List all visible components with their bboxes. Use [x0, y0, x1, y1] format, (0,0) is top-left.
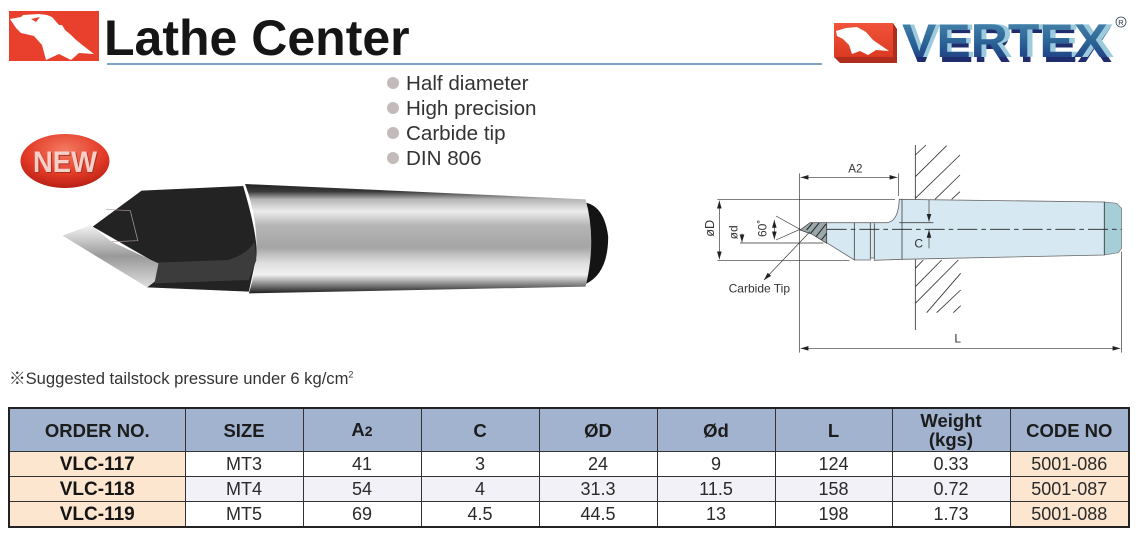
carbide tip — [800, 223, 827, 243]
specification table: 0.33 — [933, 454, 969, 474]
centre line — [827, 228, 1122, 231]
logo: red eagle — [9, 11, 99, 61]
tail — [1104, 202, 1122, 255]
feature bullet list: Carbide tip — [406, 122, 506, 145]
label 60 degrees: 60˚ — [756, 220, 770, 237]
specification table: 9 — [711, 454, 721, 474]
title underline — [107, 63, 822, 65]
specification table — [8, 407, 1130, 528]
specification table: Ød — [703, 420, 729, 440]
specification table: 11.5 — [699, 478, 733, 498]
specification table: 54 — [352, 478, 372, 498]
flat face highlight — [155, 242, 256, 283]
taper shank — [245, 184, 591, 293]
specification table: CODE NO — [1026, 420, 1112, 440]
specification table: 31.3 — [580, 478, 616, 498]
section lines — [854, 199, 1104, 260]
dimension lines — [717, 173, 1121, 353]
logo: Vertex brand: VERTEX — [906, 14, 1114, 67]
specification table: MT4 — [226, 478, 262, 498]
specification table: SIZE — [223, 420, 265, 440]
badge: NEW — [20, 134, 110, 188]
specification table: 5001-087 — [1031, 478, 1107, 498]
feature bullet list: Half diameter — [406, 72, 528, 95]
specification table: MT5 — [226, 504, 262, 524]
specification table: 158 — [818, 478, 849, 498]
carbide insert outline — [106, 209, 138, 242]
wall hatch — [915, 145, 961, 330]
photo: lathe center — [62, 184, 608, 294]
feature bullet list — [387, 72, 536, 170]
specification table: 124 — [818, 454, 849, 474]
logo: Vertex brand: R — [1118, 18, 1124, 27]
specification table: 4.5 — [467, 504, 493, 524]
specification table: ORDER NO. — [45, 420, 150, 440]
specification table: 44.5 — [580, 504, 616, 524]
specification table: VLC-117 — [60, 454, 135, 474]
specification table: MT3 — [226, 454, 262, 474]
specification table: A2 — [351, 418, 373, 440]
label L: L — [954, 331, 961, 345]
specification table: 24 — [588, 454, 608, 474]
cone tip — [63, 225, 159, 287]
specification table: 5001-088 — [1031, 504, 1107, 524]
specification table: VLC-119 — [60, 504, 135, 524]
specification table: (kgs) — [929, 429, 973, 450]
specification table: C — [473, 420, 487, 440]
badge: NEW: NEW — [34, 147, 99, 180]
specification table: 3 — [475, 454, 485, 474]
tail end — [586, 203, 608, 284]
label C: C — [914, 236, 923, 250]
specification table: 69 — [352, 504, 372, 524]
logo: Vertex brand — [834, 14, 1126, 70]
label diameter d: ød — [727, 225, 741, 239]
half-cut black neck — [93, 186, 257, 292]
specification table: 41 — [352, 454, 372, 474]
title: Lathe Center — [104, 10, 410, 66]
label diameter D: øD — [703, 220, 717, 237]
specification table: ØD — [584, 420, 612, 440]
feature bullet list: High precision — [406, 97, 536, 120]
specification table: 13 — [706, 504, 726, 524]
feature bullet list: DIN 806 — [406, 147, 482, 170]
logo: Vertex brand: VERTEX — [902, 14, 1108, 67]
technical diagram — [703, 144, 1122, 353]
specification table: VLC-118 — [60, 478, 135, 500]
specification table: 4 — [475, 478, 485, 498]
note: tailstock pressure: ※Suggested tailstock pressure under 6 kg/cm2 — [9, 369, 353, 388]
label carbide tip: Carbide Tip — [729, 282, 790, 296]
specification table: Weight — [920, 410, 982, 431]
specification table: 198 — [818, 504, 849, 524]
specification table: 1.73 — [933, 504, 969, 524]
specification table: 5001-086 — [1031, 454, 1107, 474]
specification table: 0.72 — [933, 478, 969, 498]
specification table: L — [828, 420, 839, 440]
tool body — [827, 199, 1104, 260]
label A2: A2 — [848, 163, 862, 176]
badge: NEW: NEW — [33, 146, 98, 179]
